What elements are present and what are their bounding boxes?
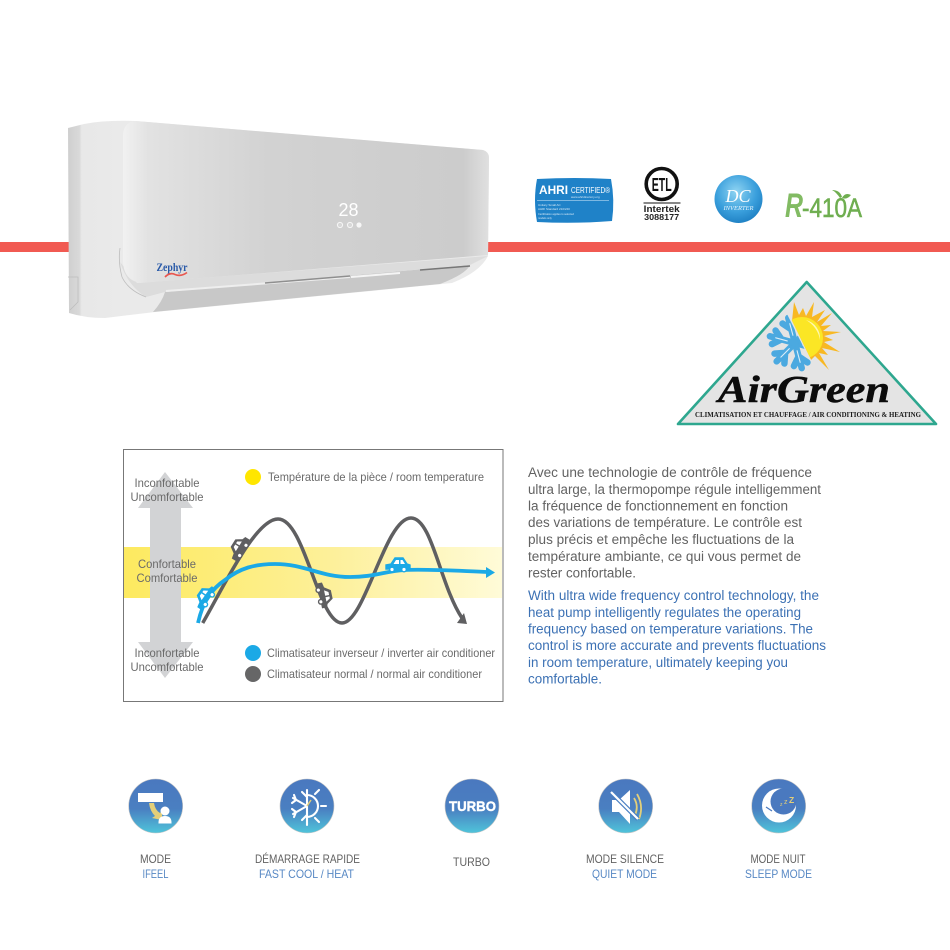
label: sleep mode (745, 852, 812, 881)
feature: iFeel mode (129, 779, 183, 881)
legend: inverter air conditioner: Climatisateur inverseur / inverter air conditioner (267, 646, 495, 660)
comfort chart panel (124, 450, 503, 702)
AHRI certified badge: AHRI Standard 210/240 (538, 207, 570, 211)
icon: snowflake and sun (280, 779, 334, 833)
AirGreen triangle logo (678, 282, 936, 424)
label: sleep mode: MODE NUIT (750, 852, 806, 866)
label: fast cool: FAST COOL / HEAT (259, 867, 355, 881)
French description text: Avec une technologie de contrôle de fréquence (528, 465, 812, 480)
label: fast cool: DÉMARRAGE RAPIDE (255, 851, 360, 866)
English description text: control is more accurate and prevents fluctuations (528, 638, 826, 653)
English description text: in room temperature, ultimately keeping you (528, 655, 788, 670)
label: quiet mode (586, 852, 664, 881)
axis labels: Confortable (138, 557, 196, 571)
icon: crescent moon: Z (789, 795, 794, 805)
normal AC curve (203, 518, 467, 624)
English description text: comfortable. (528, 672, 602, 686)
label: turbo: TURBO (453, 855, 490, 869)
DC inverter ball (714, 175, 762, 223)
axis labels: Inconfortable (134, 476, 200, 490)
temperature display: 28 (338, 200, 358, 220)
car: inverter start (192, 583, 217, 611)
temperature display (337, 200, 362, 228)
AHRI certified badge: CERTIFIED® (571, 186, 610, 195)
AHRI certified badge: Certification applies to selected (538, 212, 574, 216)
inverter AC curve (198, 564, 495, 623)
car: normal descending (315, 582, 333, 608)
label: quiet mode: MODE SILENCE (586, 852, 664, 866)
tagline: CLIMATISATION ET CHAUFFAGE / AIR CONDITIONING & HEATING (695, 411, 922, 419)
icon: turbo: TURBO (449, 799, 496, 814)
feature: quiet mode (586, 779, 664, 881)
ETL Intertek mark (644, 168, 680, 222)
French description text: la fréquence de fonctionnement en fonction (528, 498, 788, 514)
certification logos (535, 168, 862, 225)
AHRI certified badge: Unitary Small AC (538, 203, 562, 207)
icon: muted speaker (599, 779, 653, 833)
DC inverter ball: DC (724, 186, 751, 206)
icon: crescent moon: z (780, 802, 783, 808)
side details (68, 248, 146, 310)
comfort band (124, 547, 502, 598)
R-410A mark (785, 187, 862, 225)
triangle (678, 282, 936, 424)
English description text: frequency based on temperature variations. The (528, 622, 813, 636)
feature: sleep mode (745, 779, 812, 881)
air conditioner unit (68, 121, 489, 318)
AHRI certified badge (535, 178, 613, 223)
axis labels (130, 476, 204, 674)
ETL Intertek mark: ETL (652, 175, 672, 195)
axis labels: Inconfortable (134, 646, 200, 660)
feature: turbo (445, 779, 499, 869)
ETL Intertek mark: 3088177 (644, 212, 679, 222)
DC inverter ball: INVERTER (723, 205, 754, 212)
French description text: ultra large, la thermopompe régule intelligemment (528, 482, 821, 497)
car: normal climbing (227, 534, 251, 562)
legend: normal air conditioner: Climatisateur normal / normal air conditioner (267, 667, 482, 681)
English description text (528, 588, 826, 686)
chart frame (124, 450, 503, 702)
French description text (528, 465, 821, 580)
label: fast cool (255, 851, 360, 881)
English description text: heat pump intelligently regulates the operating (528, 605, 801, 620)
icon: crescent moon: z (784, 799, 788, 806)
label: MODE IFEEL (140, 852, 171, 881)
label: MODE IFEEL: MODE (140, 852, 171, 866)
wordmark: AirGreen (716, 369, 890, 411)
snowflake half (766, 314, 811, 372)
feature: fast cool and heat (255, 779, 360, 881)
AHRI certified badge: AHRI (539, 183, 568, 197)
Zephyr logo: Zephyr (156, 262, 188, 274)
lower lip (120, 256, 488, 297)
car: inverter level (386, 558, 410, 572)
label: quiet mode: QUIET MODE (592, 867, 657, 881)
front panel (123, 121, 489, 283)
red horizontal band (0, 242, 950, 252)
R-410A mark: -410A (802, 193, 862, 223)
label: sleep mode: SLEEP MODE (745, 867, 812, 881)
legend: room temperature: Température de la pièce / room temperature (268, 470, 484, 484)
French description text: des variations de température. Le contrôle est (528, 515, 802, 530)
ETL Intertek mark: Intertek (644, 204, 680, 215)
axis labels: Uncomfortable (130, 660, 204, 674)
air louver (166, 266, 470, 291)
French description text: plus précis et empêche les fluctuations de la (528, 532, 794, 547)
icon: crescent moon (752, 779, 806, 833)
vertical double arrow (138, 472, 193, 678)
underside panel (153, 265, 470, 312)
icon: iFeel (129, 779, 183, 833)
English description text: With ultra wide frequency control technology, the (528, 588, 819, 603)
sun half (792, 302, 841, 370)
AHRI certified badge: models only (538, 216, 553, 220)
axis labels: Uncomfortable (130, 490, 204, 504)
label: MODE IFEEL: IFEEL (142, 867, 169, 881)
French description text: température ambiante, ce qui vous permet de (528, 549, 801, 564)
R-410A mark: R (785, 187, 803, 225)
French description text: rester confortable. (528, 566, 636, 580)
axis labels: Comfortable (136, 571, 198, 585)
AHRI certified badge: www.ahridirectory.org (571, 195, 600, 199)
unit body (68, 121, 489, 318)
